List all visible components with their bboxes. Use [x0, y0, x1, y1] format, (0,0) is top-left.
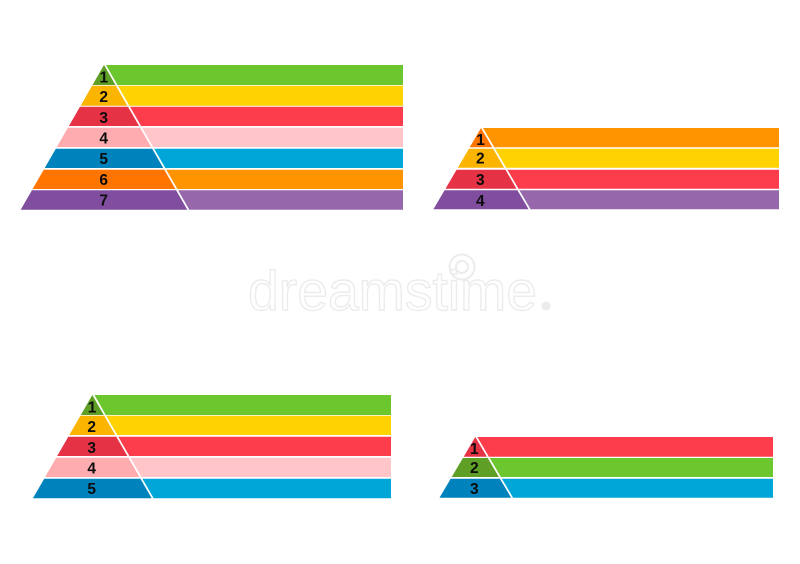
- row 2: [69, 416, 391, 436]
- row 4: [45, 458, 391, 478]
- panel: three-level pyramid: [440, 437, 773, 498]
- row 1: 1: [88, 400, 97, 416]
- row 4: 4: [476, 193, 485, 210]
- row 4: [57, 128, 403, 148]
- row 5: 5: [87, 481, 96, 498]
- row 4: [433, 190, 779, 210]
- row 4: 4: [87, 460, 96, 478]
- row 7: 7: [99, 193, 108, 210]
- row 1: [470, 128, 779, 149]
- row 3: 3: [99, 110, 108, 127]
- row 1: 1: [476, 132, 485, 149]
- row 1: [464, 437, 773, 458]
- row 6: [33, 170, 403, 189]
- row 6: 6: [99, 172, 108, 189]
- row 2: 2: [476, 151, 485, 168]
- panel: seven-level pyramid: [21, 65, 403, 210]
- row 3: 3: [87, 440, 96, 457]
- row 2: 2: [470, 460, 479, 477]
- row 2: [452, 458, 773, 477]
- row 3: 3: [476, 172, 485, 189]
- row 7: [21, 190, 403, 210]
- row 3: [440, 479, 773, 498]
- row 5: [33, 479, 391, 498]
- row 3: [446, 170, 779, 189]
- row 2: [458, 149, 779, 168]
- row 2: 2: [99, 89, 108, 106]
- row 2: [81, 86, 403, 106]
- row 1: 1: [470, 441, 479, 458]
- row 3: 3: [470, 481, 479, 498]
- row 1: 1: [99, 70, 108, 86]
- row 4: 4: [99, 130, 108, 148]
- panel: four-level pyramid: [433, 128, 779, 210]
- row 5: 5: [99, 151, 108, 168]
- row 1: [81, 395, 391, 416]
- row 3: [57, 437, 391, 457]
- row 3: [69, 107, 403, 127]
- panel: five-level pyramid: [33, 395, 391, 498]
- row 2: 2: [87, 419, 96, 436]
- row 5: [45, 149, 403, 168]
- watermark: dreamstime: [248, 259, 537, 322]
- row 1: [92, 65, 403, 86]
